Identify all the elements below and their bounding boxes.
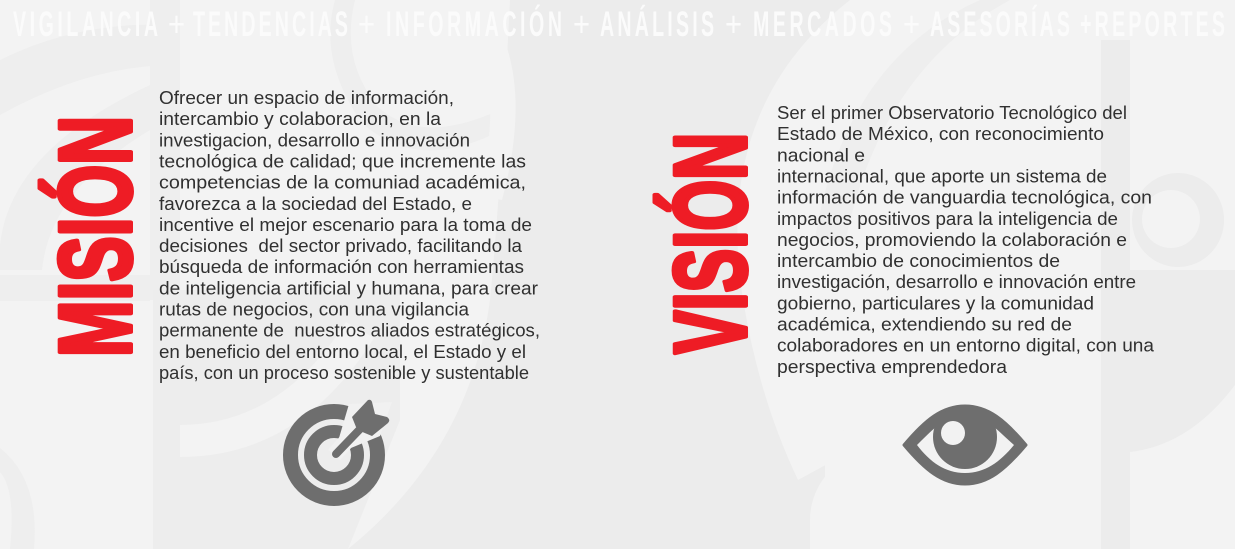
top banner keywords: +REPORTES bbox=[1080, 5, 1225, 45]
mission text: rutas de negocios, con una vigilancia bbox=[159, 300, 470, 320]
vision text bbox=[777, 103, 1155, 377]
mission text: país, con un proceso sostenible y sustentable bbox=[159, 363, 529, 383]
heading: VISIÓN: VISIÓN bbox=[654, 133, 768, 354]
top banner keywords: ANÁLISIS bbox=[600, 3, 714, 45]
mission text: tecnológica de calidad; que incremente las bbox=[159, 152, 526, 172]
mission text: permanente de nuestros aliados estratégicos, bbox=[159, 321, 540, 341]
top banner keywords bbox=[13, 3, 1225, 45]
mission text: intercambio y colaboracion, en la bbox=[159, 109, 442, 129]
vision text: impactos positivos para la inteligencia de bbox=[777, 209, 1118, 229]
mission text: búsqueda de información con herramientas bbox=[159, 257, 524, 277]
top banner keywords: + bbox=[903, 4, 920, 44]
mission text: competencias de la comuniad académica, bbox=[159, 173, 526, 193]
top banner keywords: + bbox=[168, 4, 185, 44]
vision text: gobierno, particulares y la comunidad bbox=[777, 293, 1094, 313]
vision text: información de vanguardia tecnológica, con bbox=[777, 188, 1152, 208]
icon: eye bbox=[904, 405, 1026, 484]
mission text: favorezca a la sociedad del Estado, e bbox=[159, 194, 472, 214]
vision text: investigación, desarrollo e innovación entre bbox=[777, 272, 1136, 292]
mission text: investigacion, desarrollo e innovación bbox=[159, 130, 470, 150]
vision text: perspectiva emprendedora bbox=[777, 357, 1008, 377]
top banner keywords: VIGILANCIA bbox=[13, 5, 158, 45]
mission text: Ofrecer un espacio de información, bbox=[159, 88, 454, 108]
vision text: Ser el primer Observatorio Tecnológico del bbox=[777, 103, 1127, 123]
mission text bbox=[159, 88, 540, 383]
vision text: colaboradores en un entorno digital, con una bbox=[777, 336, 1155, 356]
vision text: académica, extendiendo su red de bbox=[777, 314, 1072, 334]
vision text: internacional, que aporte un sistema de bbox=[777, 166, 1107, 186]
top banner keywords: TENDENCIAS bbox=[193, 5, 348, 45]
mission text: en beneficio del entorno local, el Estado y el bbox=[159, 342, 526, 362]
vision text: intercambio de conocimientos de bbox=[777, 251, 1060, 271]
vision text: nacional e bbox=[777, 145, 865, 165]
mission text: de inteligencia artificial y humana, para crear bbox=[159, 278, 538, 298]
top banner keywords: + bbox=[358, 4, 375, 44]
top banner keywords: ASESORÍAS bbox=[930, 3, 1070, 45]
top banner keywords: INFORMACIÓN bbox=[386, 3, 562, 45]
mission text: decisiones del sector privado, facilitando la bbox=[159, 236, 523, 256]
vision text: Estado de México, con reconocimiento bbox=[777, 124, 1104, 144]
heading: MISIÓN: MISIÓN bbox=[39, 116, 153, 357]
top banner keywords: + bbox=[725, 4, 742, 44]
vision text: negocios, promoviendo la colaboración e bbox=[777, 230, 1127, 250]
top banner keywords: + bbox=[573, 4, 590, 44]
icon: target with arrow bbox=[290, 400, 392, 498]
top banner keywords: MERCADOS bbox=[753, 5, 892, 45]
mission text: incentive el mejor escenario para la toma de bbox=[159, 215, 532, 235]
